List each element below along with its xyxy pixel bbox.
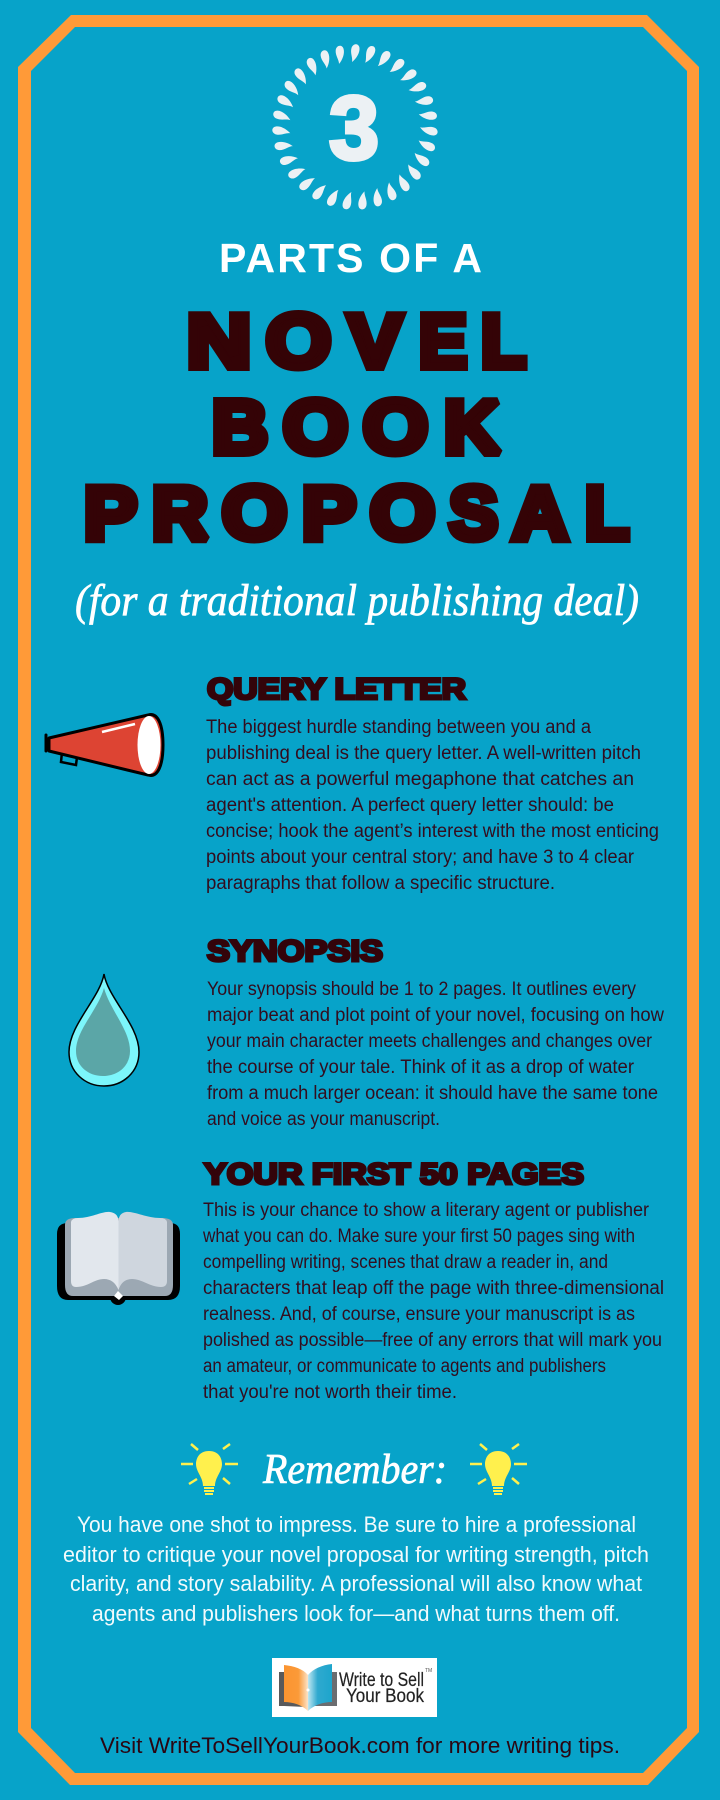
icon: open book xyxy=(57,1212,180,1305)
title: novel book proposal: P xyxy=(84,472,137,556)
title: novel book proposal: N xyxy=(187,300,251,384)
title: novel book proposal: E xyxy=(419,300,467,384)
title: novel book proposal: K xyxy=(444,386,500,470)
title: novel book proposal: O xyxy=(363,386,428,470)
title: novel book proposal: A xyxy=(512,472,568,556)
title: novel book proposal: O xyxy=(370,472,435,556)
text: query letter body xyxy=(206,717,659,894)
icon: left light bulb xyxy=(181,1444,238,1494)
text: query letter body: paragraphs that follow a specific structure. xyxy=(206,873,555,894)
section: query letter xyxy=(206,673,659,894)
logo: write to sell your book: Your Book xyxy=(346,1686,424,1707)
heading: synopsis: SYNOPSIS xyxy=(207,935,383,968)
text: first 50 pages body: that you're not worth their time. xyxy=(203,1382,457,1403)
text: first 50 pages body: polished as possible—free of any errors that will mark you xyxy=(203,1330,662,1351)
heading: your first 50 pages: YOUR FIRST 50 PAGES xyxy=(204,1158,584,1191)
heading: query letter: QUERY LETTER xyxy=(207,673,466,706)
text: remember paragraph: You have one shot to impress. Be sure to hire a professional xyxy=(77,1512,636,1537)
text: remember paragraph xyxy=(63,1512,649,1626)
logo: write to sell your book: Write to Sell xyxy=(339,1670,424,1691)
logo: write to sell your book xyxy=(272,1658,437,1717)
text: synopsis body: Your synopsis should be 1 to 2 pages. It outlines every xyxy=(207,979,636,1000)
heading: remember: Remember: xyxy=(262,1447,447,1493)
title: novel book proposal: R xyxy=(152,472,208,556)
text: synopsis body: and voice as your manuscript. xyxy=(207,1109,440,1130)
badge: ring of drops with number 3 xyxy=(272,44,438,210)
text: synopsis body: your main character meets challenges and changes over xyxy=(207,1031,653,1052)
title: novel book proposal: L xyxy=(585,472,629,556)
title: novel book proposal: O xyxy=(266,300,331,384)
icon: right light bulb xyxy=(470,1444,527,1494)
title: novel book proposal: P xyxy=(302,472,356,556)
text: first 50 pages body: what you can do. Make sure your first 50 pages sing with xyxy=(202,1226,635,1247)
text: query letter body: agent's attention. A perfect query letter should: be xyxy=(206,795,614,816)
text: query letter body: publishing deal is the query letter. A well-written pitch xyxy=(206,743,641,764)
text: query letter body: can act as a powerful megaphone that catches an xyxy=(206,769,634,790)
icon: water drop xyxy=(69,974,139,1086)
title: novel book proposal: S xyxy=(449,472,498,556)
section: your first 50 pages xyxy=(202,1158,664,1403)
subtitle: parts of a: PARTS OF A xyxy=(219,235,482,281)
badge: ring of drops with number 3: 3 xyxy=(329,79,379,179)
text: first 50 pages body: This is your chance to show a literary agent or publisher xyxy=(203,1200,650,1221)
title: novel book proposal xyxy=(84,300,629,556)
title: novel book proposal: L xyxy=(481,300,526,384)
text: first 50 pages body: realness. And, of course, ensure your manuscript is as xyxy=(203,1304,635,1325)
text: remember paragraph: clarity, and story salability. A professional will also know what xyxy=(70,1571,642,1596)
text: synopsis body xyxy=(207,979,664,1130)
text: first 50 pages body: an amateur, or communicate to agents and publishers xyxy=(203,1356,606,1377)
title: novel book proposal: O xyxy=(283,386,348,470)
text: query letter body: concise; hook the agent’s interest with the most enticing xyxy=(206,821,659,842)
text: query letter body: The biggest hurdle standing between you and a xyxy=(206,717,591,738)
icon: megaphone xyxy=(46,715,163,775)
text: synopsis body: from a much larger ocean: it should have the same tone xyxy=(207,1083,658,1104)
title: novel book proposal: O xyxy=(222,472,287,556)
title: novel book proposal: B xyxy=(212,386,268,470)
subheading: for a traditional publishing deal: (for a traditional publishing deal) xyxy=(75,576,639,625)
text: synopsis body: the course of your tale. Think of it as a drop of water xyxy=(207,1057,635,1078)
text: query letter body: points about your central story; and have 3 to 4 clear xyxy=(206,847,635,868)
section: synopsis xyxy=(207,935,664,1130)
logo: write to sell your book: TM xyxy=(425,1668,432,1674)
text: first 50 pages body xyxy=(202,1200,664,1403)
title: novel book proposal: V xyxy=(348,300,402,384)
text: first 50 pages body: characters that leap off the page with three-dimensional xyxy=(203,1278,664,1299)
text: remember paragraph: editor to critique your novel proposal for writing strength, pitch xyxy=(63,1542,649,1567)
text: synopsis body: major beat and plot point of your novel, focusing on how xyxy=(207,1005,664,1026)
text: remember paragraph: agents and publishers look for—and what turns them off. xyxy=(92,1601,620,1626)
footer: visit website: Visit WriteToSellYourBook.com for more writing tips. xyxy=(100,1733,620,1758)
text: first 50 pages body: compelling writing, scenes that draw a reader in, and xyxy=(203,1252,608,1273)
